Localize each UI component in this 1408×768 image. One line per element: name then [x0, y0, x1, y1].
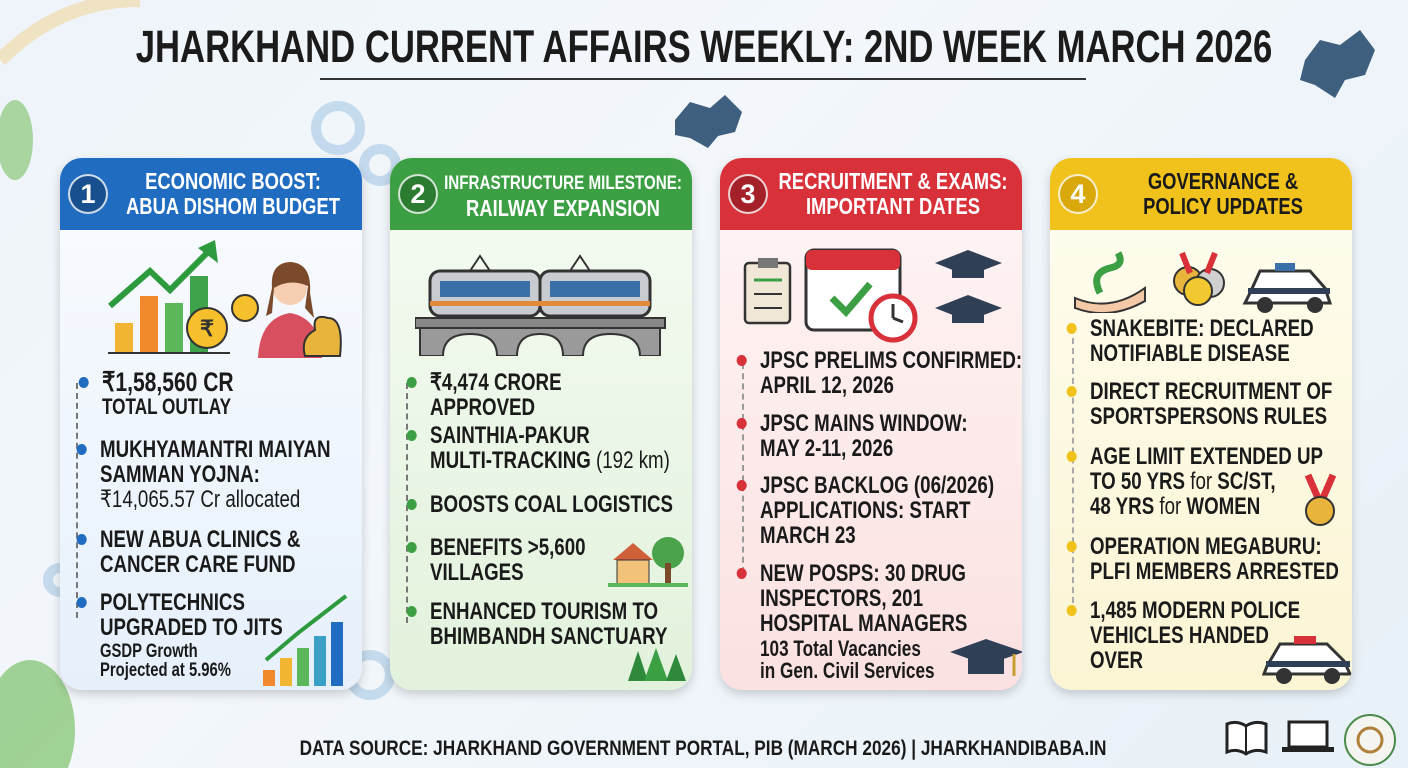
- bullet: sainthia-pakur: MULTI-TRACKING (192 km): [430, 447, 670, 474]
- bullet: prelims: APRIL 12, 2026: [760, 372, 894, 399]
- bullet: maiyan samman: [76, 436, 331, 513]
- panel: recruitment: [720, 158, 1022, 690]
- bullet: snakebite: NOTIFIABLE DISEASE: [1090, 340, 1290, 367]
- icon: train on bridge: [415, 254, 666, 356]
- bullet: abua clinics: [76, 526, 300, 578]
- footer: data source: DATA SOURCE: JHARKHAND GOVERNMENT PORTAL, PIB (MARCH 2026) | JHARKHANDIBABA.IN: [300, 737, 1106, 760]
- bullet: sainthia-pakur: [406, 422, 670, 474]
- panel header 4: POLICY UPDATES: [1143, 193, 1303, 219]
- bullet: new posts: HOSPITAL MANAGERS: [760, 610, 967, 637]
- panel: economic boost: [60, 158, 362, 690]
- bullet: abua clinics: NEW ABUA CLINICS &: [100, 526, 300, 553]
- bullet: prelims: JPSC PRELIMS CONFIRMED:: [760, 347, 1022, 374]
- panel header 3: [720, 158, 1022, 230]
- bullet: new posts: in Gen. Civil Services: [760, 658, 935, 683]
- bullet: polytechnics: UPGRADED TO JITS: [100, 614, 283, 641]
- bullet: backlog: MARCH 23: [760, 522, 856, 549]
- icon: clipboard calendar clock caps: [744, 248, 1002, 342]
- icon: growth chart and woman: [108, 240, 342, 358]
- bullet: abua clinics: CANCER CARE FUND: [100, 551, 296, 578]
- bullet: backlog: JPSC BACKLOG (06/2026): [760, 472, 994, 499]
- icon: jharkhand map top right: [1300, 30, 1375, 98]
- bullet: new posts: INSPECTORS, 201: [760, 585, 923, 612]
- panel header 2: RAILWAY EXPANSION: [466, 195, 660, 221]
- panel: governance: [1050, 158, 1352, 690]
- bullet: age limit: [1066, 443, 1323, 520]
- bullet: polytechnics: POLYTECHNICS: [100, 589, 245, 616]
- bullet: sainthia-pakur: SAINTHIA-PAKUR: [430, 422, 590, 449]
- panel header 1: [60, 158, 362, 230]
- bullet: mains: [736, 410, 968, 462]
- bullet: mains: JPSC MAINS WINDOW:: [760, 410, 968, 437]
- bullet: new posts: 103 Total Vacancies: [760, 636, 921, 661]
- bullet: 4474 crore: [406, 369, 562, 421]
- panel header 2: [390, 158, 692, 230]
- bullet: sportspersons: SPORTSPERSONS RULES: [1090, 403, 1327, 430]
- title: JHARKHAND CURRENT AFFAIRS WEEKLY: 2ND WEEK MARCH 2026: [136, 21, 1272, 72]
- bullet: sportspersons: [1066, 378, 1332, 430]
- bullet: coal logistics: BOOSTS COAL LOGISTICS: [430, 491, 673, 518]
- bullet: police vehicles: 1,485 MODERN POLICE: [1090, 597, 1300, 624]
- bullet: total outlay: [78, 367, 234, 419]
- panel header 1: ECONOMIC BOOST:: [145, 168, 321, 194]
- panel header 4: 4: [1070, 179, 1086, 209]
- bullet: megaburu: OPERATION MEGABURU:: [1090, 533, 1322, 560]
- bullet: megaburu: [1066, 533, 1339, 585]
- icon: jharkhand map center: [675, 95, 742, 148]
- bullet: police vehicles: VEHICLES HANDED: [1090, 622, 1269, 649]
- panel header 3: RECRUITMENT & EXAMS:: [779, 168, 1007, 194]
- panel header 2: INFRASTRUCTURE MILESTONE:: [444, 173, 682, 194]
- panel: infrastructure: [390, 158, 692, 690]
- bullet: snakebite: SNAKEBITE: DECLARED: [1090, 315, 1314, 342]
- bullet: tourism: BHIMBANDH SANCTUARY: [430, 623, 667, 650]
- bullet: total outlay: ₹1,58,560 CR: [102, 367, 234, 397]
- bullet: polytechnics: Projected at 5.96%: [100, 660, 231, 681]
- bullet: polytechnics: GSDP Growth: [100, 641, 198, 662]
- bullet: age limit: TO 50 YRS for SC/ST,: [1090, 468, 1276, 495]
- icon: medal: [1304, 474, 1336, 526]
- panel header 3: IMPORTANT DATES: [806, 193, 980, 219]
- bullet: maiyan samman: SAMMAN YOJNA:: [100, 461, 260, 488]
- bullet: tourism: [406, 598, 668, 650]
- icon: snake hand, medals, police car: [1074, 251, 1332, 313]
- bullet: police vehicles: [1066, 597, 1300, 674]
- bullet: villages: BENEFITS >5,600: [430, 534, 586, 561]
- panel header 1: 1: [80, 179, 96, 209]
- bullet: age limit: 48 YRS for WOMEN: [1090, 493, 1260, 520]
- bullet: prelims: [736, 347, 1022, 399]
- bullet: sportspersons: DIRECT RECRUITMENT OF: [1090, 378, 1332, 405]
- icon: graduation cap: [950, 639, 1022, 676]
- panel header 2: 2: [410, 179, 426, 209]
- bullet: new posts: NEW POSPS: 30 DRUG: [760, 560, 966, 587]
- panel header 4: GOVERNANCE &: [1148, 168, 1298, 194]
- bullet: mains: MAY 2-11, 2026: [760, 435, 893, 462]
- bullet: villages: [406, 534, 586, 586]
- icon: forest: [628, 648, 686, 681]
- icon: police car: [1262, 636, 1352, 684]
- icon: growth chart and woman: ₹: [200, 316, 214, 341]
- bullet: tourism: ENHANCED TOURISM TO: [430, 598, 658, 625]
- bullet: maiyan samman: ₹14,065.57 Cr allocated: [100, 486, 300, 513]
- bullet: villages: VILLAGES: [430, 559, 524, 586]
- bullet: 4474 crore: APPROVED: [430, 394, 535, 421]
- bullet: police vehicles: OVER: [1090, 647, 1143, 674]
- icon: house and tree: [608, 537, 688, 587]
- bullet: new posts: [736, 560, 967, 683]
- bullet: backlog: [736, 472, 994, 549]
- bullet: total outlay: TOTAL OUTLAY: [102, 394, 231, 419]
- bullet: snakebite: [1066, 315, 1314, 367]
- panel header 1: ABUA DISHOM BUDGET: [126, 193, 340, 219]
- bullet: maiyan samman: MUKHYAMANTRI MAIYAN: [100, 436, 331, 463]
- icons: book, laptop, emblem: [1226, 714, 1396, 766]
- bullet: megaburu: PLFI MEMBERS ARRESTED: [1090, 558, 1339, 585]
- bullet: backlog: APPLICATIONS: START: [760, 497, 970, 524]
- bullet: age limit: AGE LIMIT EXTENDED UP: [1090, 443, 1323, 470]
- panel header 4: [1050, 158, 1352, 230]
- icon: bar chart growth: [263, 594, 348, 686]
- bullet: polytechnics: [76, 589, 283, 681]
- bullet: 4474 crore: ₹4,474 CRORE: [430, 369, 562, 396]
- panel header 3: 3: [740, 179, 756, 209]
